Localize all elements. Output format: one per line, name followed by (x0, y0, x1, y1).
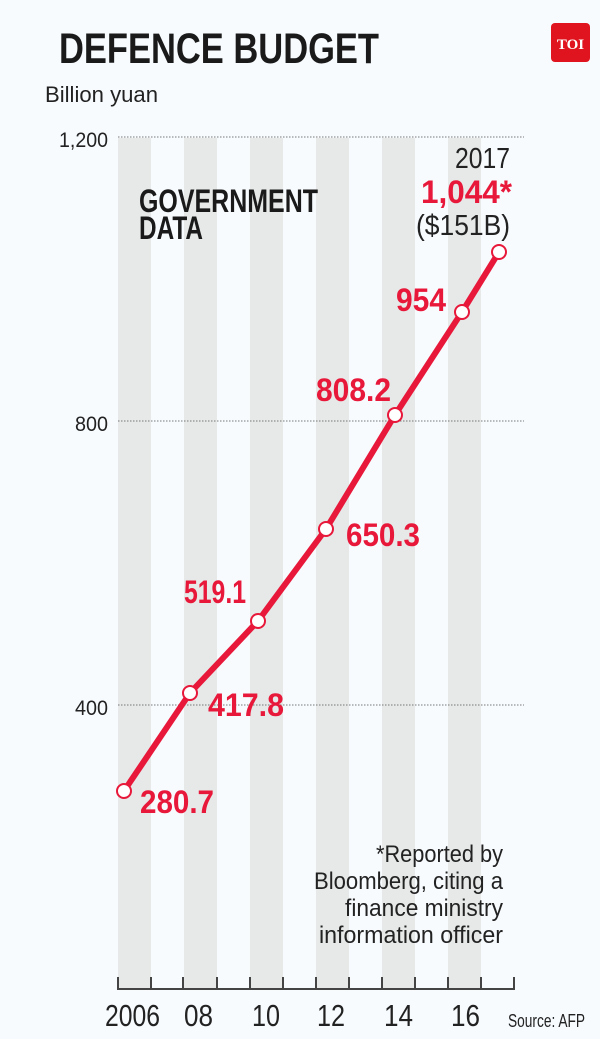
data labels: 519.1 (184, 574, 246, 610)
y-axis labels: 1,200 (59, 129, 108, 152)
callout: 2017 value: ($151B) (416, 210, 510, 242)
y-axis labels (59, 129, 108, 720)
data labels: 954 (396, 282, 446, 318)
data labels: 650.3 (346, 517, 420, 553)
x-axis labels: 08 (184, 998, 213, 1033)
footnote: information officer (319, 922, 503, 949)
label: government data: DATA (139, 210, 203, 246)
x axis (117, 977, 515, 989)
x-axis labels: 12 (317, 998, 345, 1033)
data labels: 417.8 (208, 687, 284, 723)
footnote: Bloomberg, citing a (314, 868, 504, 895)
title: DEFENCE BUDGET (59, 25, 379, 73)
x-axis labels: 2006 (105, 998, 160, 1033)
footnote: finance ministry (345, 895, 503, 922)
y-axis labels: 800 (75, 413, 108, 436)
data labels: 280.7 (140, 784, 214, 820)
data labels: 808.2 (316, 372, 391, 408)
x-axis labels: 16 (451, 998, 480, 1033)
icon: TOI logo (551, 23, 590, 62)
label: government data: GOVERNMENT (139, 183, 318, 219)
x-axis labels: 14 (384, 998, 413, 1033)
x-axis labels: 10 (252, 998, 280, 1033)
data labels (140, 282, 446, 820)
callout: 2017 value: 2017 (455, 143, 510, 175)
callout: 2017 value: 1,044* (421, 174, 513, 210)
icon: TOI logo: TOI (557, 37, 584, 53)
footnote (314, 841, 504, 949)
label: government data (139, 183, 318, 246)
y-axis labels: 400 (75, 697, 108, 720)
footnote: *Reported by (376, 841, 503, 868)
x-axis labels (105, 998, 480, 1033)
y-axis unit label: Billion yuan (45, 82, 158, 107)
line chart (117, 245, 506, 798)
callout: 2017 value (416, 143, 513, 242)
